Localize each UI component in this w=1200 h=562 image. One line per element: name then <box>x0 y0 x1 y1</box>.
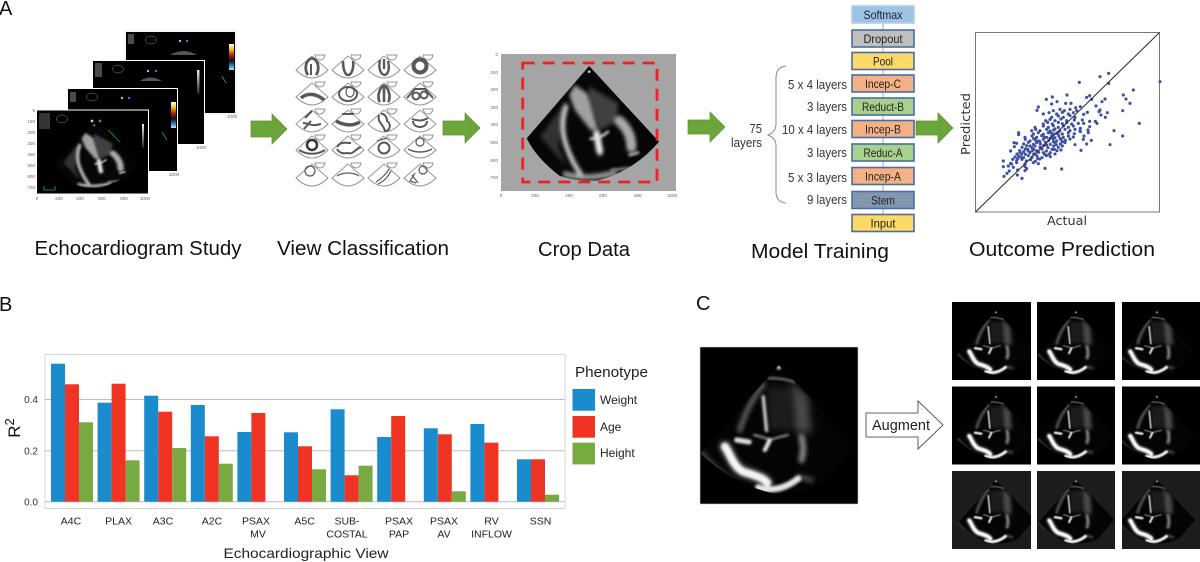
study frame 1 (front): 0 <box>32 108 35 113</box>
x axis categories: AV <box>437 528 451 540</box>
x axis categories: A2C <box>202 516 223 528</box>
panel: model architecture <box>731 6 914 232</box>
weight bars <box>51 364 531 502</box>
x axis title: Echocardiographic View <box>224 545 389 561</box>
study frame 1 (front): 200 <box>55 196 63 201</box>
network blocks: Reduc-A <box>864 146 902 160</box>
panel: crop data image <box>490 52 678 198</box>
study frame 1 (front): 400 <box>27 152 35 157</box>
panel: view classification icons <box>296 55 436 186</box>
network blocks: Input <box>870 216 896 230</box>
panel: original echo image <box>700 347 858 504</box>
x axis categories: PSAX <box>385 516 413 528</box>
arrow 3 <box>688 112 725 142</box>
x axis categories: INFLOW <box>471 528 512 540</box>
brace <box>768 66 786 203</box>
arrow 2 <box>443 113 480 143</box>
study frame 3 <box>92 60 207 150</box>
study frame 1 (front): 500 <box>27 163 35 168</box>
panel: crop data image: 500 <box>490 140 498 145</box>
y axis ticks: 0.2 <box>24 446 38 458</box>
study frame 1 (front): 700 <box>27 185 35 190</box>
panel: crop data image: 1000 <box>667 193 678 198</box>
study frame 4 (back) <box>125 31 238 119</box>
panel: crop data image: 300 <box>490 105 498 110</box>
x axis categories: PAP <box>389 528 409 540</box>
network blocks: Incep-A <box>865 169 901 183</box>
y axis title: 2 <box>2 418 17 425</box>
study frame 4 (back): 1000 <box>227 114 238 119</box>
y axis ticks <box>24 395 38 508</box>
panel: crop data image: 200 <box>531 193 539 198</box>
study frame 2: 1000 <box>169 172 180 177</box>
network blocks: Stem <box>871 193 895 207</box>
study frame 1 (front): 800 <box>120 196 128 201</box>
scatter points <box>1003 73 1160 178</box>
network blocks: Incep-C <box>865 77 901 91</box>
legend: Age <box>600 420 622 434</box>
x axis label: Actual <box>1047 213 1087 228</box>
arrow 1 <box>251 114 287 144</box>
x axis categories: RV <box>484 516 499 528</box>
step captions: View Classification <box>277 238 449 260</box>
study frame 1 (front): 1000 <box>140 196 151 201</box>
layer counts: 5 x 4 layers <box>788 77 847 92</box>
study frame 1 (front): 600 <box>27 174 35 179</box>
panel: crop data image: 0 <box>500 193 503 198</box>
study frame 1 (front): 400 <box>76 196 84 201</box>
augment arrow: Augment <box>872 417 931 434</box>
network blocks: Softmax <box>864 8 902 22</box>
study frame 2 <box>67 88 180 177</box>
x axis categories: SUB- <box>334 516 360 528</box>
x axis categories: PSAX <box>242 516 270 528</box>
x axis categories: PSAX <box>430 516 458 528</box>
arrow 4 <box>916 113 953 143</box>
crop box <box>523 63 657 182</box>
x axis categories <box>61 516 551 540</box>
panel: echocardiogram study <box>27 31 238 201</box>
x axis categories: A5C <box>294 516 315 528</box>
layer total: 75 <box>750 121 762 136</box>
panel: crop data image: 400 <box>565 193 573 198</box>
identity line <box>976 32 1160 212</box>
legend: Weight <box>600 393 638 407</box>
x axis categories: MV <box>250 528 266 540</box>
panel label C: C <box>696 293 710 315</box>
study frame 1 (front): 200 <box>27 130 35 135</box>
x axis categories: A4C <box>61 516 82 528</box>
panel: crop data image: 600 <box>599 193 607 198</box>
network blocks: Dropout <box>864 32 903 46</box>
network blocks: Reduct-B <box>862 100 904 114</box>
study frame 1 (front): 600 <box>98 196 106 201</box>
layer counts <box>782 77 847 207</box>
legend: Height <box>600 446 635 460</box>
height bars <box>79 422 559 502</box>
layer counts: 3 layers <box>807 145 847 160</box>
legend <box>572 364 648 464</box>
chart: outcome scatter plot <box>958 32 1160 228</box>
layer counts: 9 layers <box>807 192 847 207</box>
y axis ticks: 0.4 <box>24 395 38 406</box>
y axis ticks: 0.0 <box>24 498 38 508</box>
step captions: Echocardiogram Study <box>34 238 242 260</box>
x axis categories: COSTAL <box>326 528 368 540</box>
panel: crop data image: 100 <box>490 70 498 75</box>
network blocks <box>852 6 914 232</box>
layer total <box>731 121 762 150</box>
panel: crop data image: 0 <box>495 52 498 57</box>
study frame 3: 1000 <box>196 145 207 150</box>
step captions: Outcome Prediction <box>969 239 1155 261</box>
panel: crop data image: 800 <box>634 193 642 198</box>
panel: crop data image: 600 <box>490 158 498 163</box>
augment arrow <box>866 401 943 449</box>
x axis categories: A3C <box>153 516 174 528</box>
panel: crop data image: 700 <box>490 175 498 180</box>
layer total: layers <box>731 135 762 150</box>
x axis categories: PLAX <box>105 516 132 528</box>
step captions: Crop Data <box>538 239 631 261</box>
study frame 1 (front): 0 <box>36 196 39 201</box>
panel: crop data image: 200 <box>490 87 498 92</box>
panel: crop data image: 400 <box>490 122 498 127</box>
network blocks: Incep-B <box>865 122 901 136</box>
layer counts: 3 layers <box>807 99 847 114</box>
y axis label: Predicted <box>958 93 973 155</box>
network blocks: Pool <box>873 54 893 68</box>
chart: R2 by echocardiographic view <box>2 354 565 561</box>
study frame 1 (front): 100 <box>27 119 35 124</box>
step captions <box>34 238 1155 263</box>
layer counts: 5 x 3 layers <box>788 170 847 185</box>
x axis categories: SSN <box>530 516 551 528</box>
panel: augmented image grid <box>952 302 1200 549</box>
legend: Phenotype <box>575 364 648 381</box>
y axis title: R <box>5 425 24 438</box>
age bars <box>65 384 545 502</box>
study frame 1 (front) <box>27 108 151 201</box>
layer counts: 10 x 4 layers <box>782 122 847 137</box>
study frame 1 (front): 300 <box>27 141 35 146</box>
step captions: Model Training <box>751 241 889 263</box>
